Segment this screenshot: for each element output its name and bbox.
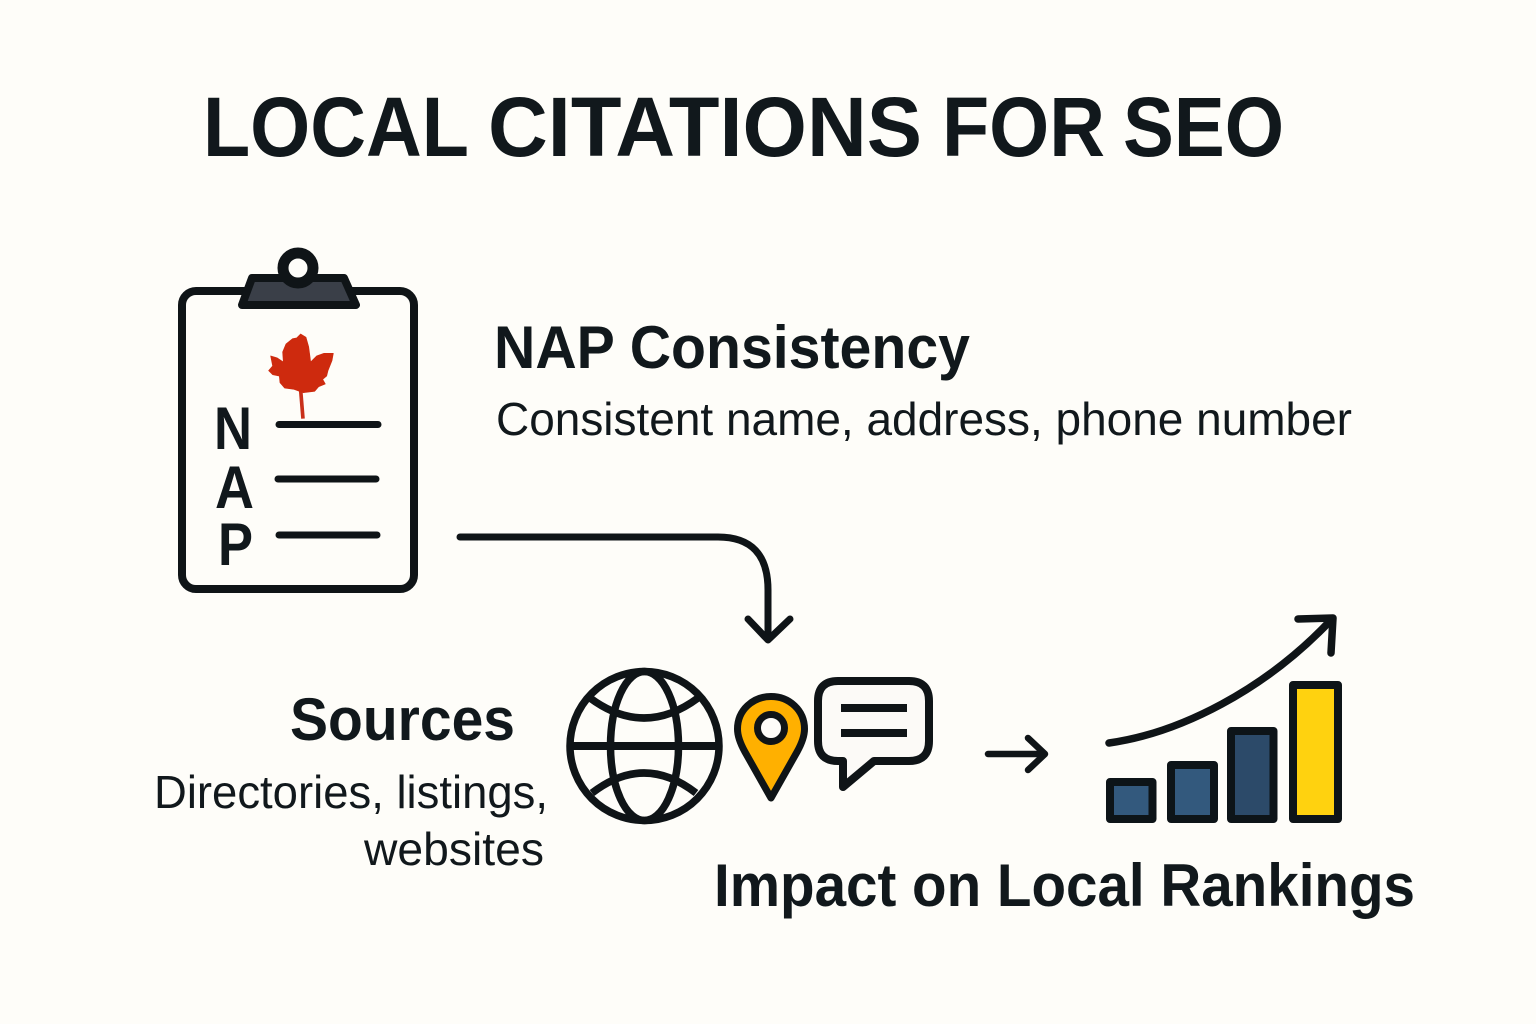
title: SEO (1123, 80, 1284, 174)
arrow: clipboard to sources (460, 537, 790, 640)
clipboard clip (242, 253, 356, 305)
icon: red maple leaf (269, 334, 333, 419)
clipboard board (182, 291, 414, 589)
title: LOCAL (203, 80, 469, 174)
text: NAP description: Consistent name, address, phone number (496, 393, 1352, 445)
icon: NAP clipboard (182, 253, 414, 589)
bar 2 (1171, 765, 1214, 819)
title (203, 80, 1284, 174)
bar 4 (1293, 685, 1338, 819)
heading: Impact on Local Rankings: Impact on Local Rankings (714, 852, 1415, 919)
text: sources description: Directories, listings, (154, 766, 548, 818)
bar chart: rising rankings (1110, 685, 1338, 819)
heading: Sources: Sources (290, 686, 515, 753)
letter P: P (218, 511, 253, 578)
bar 1 (1110, 782, 1152, 819)
arrow: upward trend (1109, 618, 1333, 743)
heading: NAP Consistency: NAP Consistency (494, 314, 971, 381)
title: FOR (942, 80, 1105, 174)
text: sources description: websites (363, 823, 544, 875)
bar 3 (1231, 731, 1274, 819)
letter N: N (214, 395, 252, 462)
icon: globe (568, 672, 721, 820)
title: CITATIONS (488, 80, 922, 174)
icon: location pin (738, 696, 804, 798)
form lines (278, 424, 378, 535)
text: sources description (154, 766, 548, 875)
letter A: A (215, 454, 254, 521)
arrow: sources to rankings (988, 738, 1045, 770)
icon: speech bubble (818, 681, 929, 787)
